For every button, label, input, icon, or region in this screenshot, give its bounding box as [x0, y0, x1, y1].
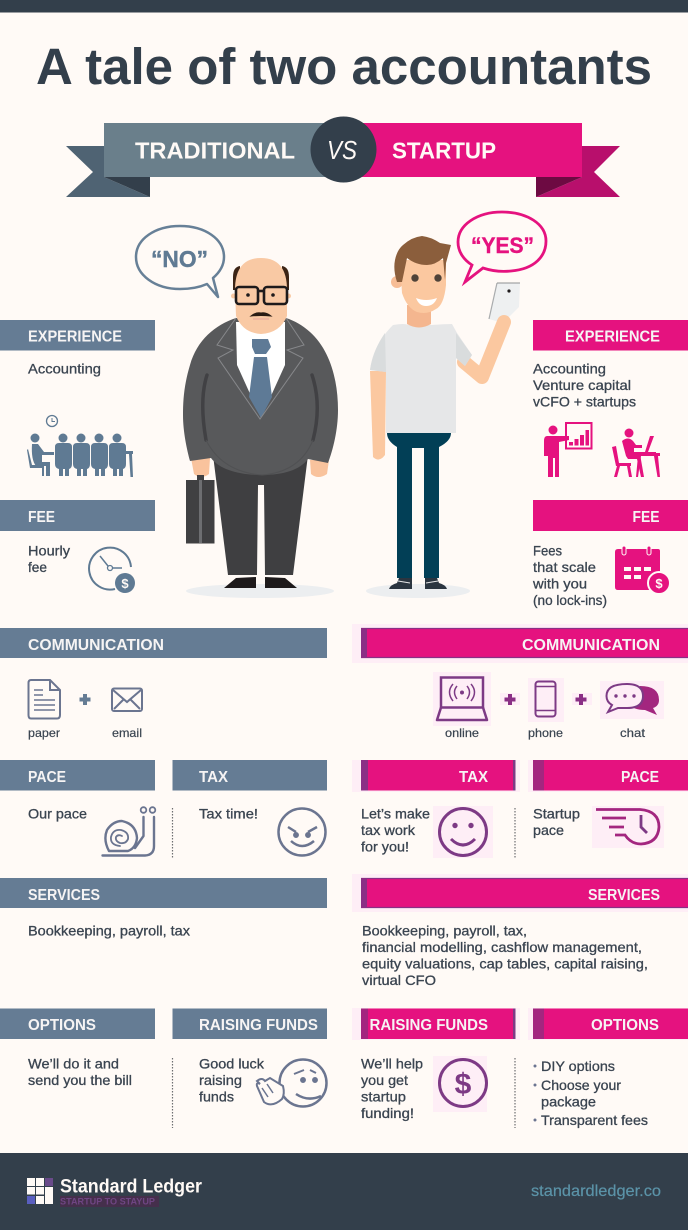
- panel: experience startup: EXPERIENCE: [565, 328, 660, 346]
- shirt: [236, 322, 285, 418]
- icon: angry face: [278, 808, 326, 856]
- text: tax time: Tax time!: [199, 806, 258, 822]
- text: options description: We’ll do it and: [28, 1056, 119, 1072]
- text: tax work: tax work: [361, 822, 416, 838]
- speech bubble: no: “NO”: [151, 246, 208, 272]
- speech bubble: no: [136, 226, 224, 297]
- right arm: [464, 322, 504, 377]
- panel: pace traditional: [0, 760, 155, 856]
- text: options description: send you the bill: [28, 1072, 132, 1088]
- icon: phone: [536, 682, 556, 716]
- panel: communication startup: COMMUNICATION: [522, 637, 660, 654]
- text: good luck: Good luck: [199, 1056, 265, 1072]
- text: startup pace: Startup: [533, 806, 580, 822]
- tagline: STARTUP TO STAYUP: [60, 1196, 155, 1206]
- panel: options startup: OPTIONS: [591, 1017, 659, 1034]
- lapels: [217, 318, 304, 419]
- head: [231, 258, 291, 334]
- character: traditional accountant: [183, 258, 338, 598]
- text: tax work: Let’s make: [361, 806, 430, 822]
- panel: tax traditional: [172, 760, 327, 856]
- text: our pace: Our pace: [28, 806, 87, 822]
- icon: plus: [80, 694, 90, 705]
- panel: communication traditional: [0, 628, 327, 740]
- character: startup accountant: [366, 236, 520, 598]
- panel: fee traditional: fee: [28, 559, 47, 575]
- icon: calendar with dollar: [615, 546, 670, 594]
- vs badge: [310, 116, 376, 182]
- footer: [0, 1153, 688, 1230]
- text: good luck: raising: [199, 1072, 242, 1088]
- panel: raising funds traditional: [172, 1008, 327, 1106]
- panel: services traditional: SERVICES: [28, 887, 100, 904]
- list: startup options: package: [541, 1094, 596, 1110]
- tie: [249, 339, 272, 418]
- panel: options traditional: OPTIONS: [28, 1017, 96, 1034]
- title: A tale of two accountants: [36, 38, 652, 95]
- panel: services startup: SERVICES: [588, 887, 660, 904]
- icon: waving face: [257, 1060, 326, 1106]
- divider: startup funds and options: [514, 1058, 516, 1128]
- list: startup options: Transparent fees: [541, 1112, 648, 1128]
- panel: options startup: [533, 1008, 688, 1128]
- panel: communication startup: [361, 628, 688, 740]
- text: we'll help: startup: [361, 1088, 406, 1104]
- text: fee description: (no lock-ins): [533, 592, 607, 608]
- top bar: [0, 0, 688, 12]
- text: we'll help: We’ll help: [361, 1056, 423, 1072]
- icon: plus: [504, 694, 516, 705]
- text: startup experience: vCFO + startups: [533, 394, 636, 410]
- suit jacket: [183, 318, 338, 475]
- text: fee description: that scale: [533, 559, 596, 575]
- trousers: [387, 433, 451, 578]
- panel: fee traditional: [0, 500, 155, 593]
- text: hourly fee: Hourly: [28, 542, 70, 558]
- text: we'll help: [361, 1056, 423, 1121]
- icon: paper: [28, 680, 60, 718]
- text: startup experience: Accounting: [533, 360, 606, 376]
- text: we'll help: you get: [361, 1072, 408, 1088]
- pale halos behind startup elements: [352, 624, 688, 1112]
- text: fee description: with you: [532, 576, 587, 592]
- ribbon label: traditional: TRADITIONAL: [135, 138, 295, 164]
- panel: fee startup: FEE: [632, 509, 660, 526]
- list: startup options: [534, 1058, 648, 1128]
- text: tax work: for you!: [361, 838, 409, 854]
- panel: tax startup: [361, 760, 516, 856]
- icon: clock with dollar: [89, 548, 135, 593]
- brand name: Standard Ledger: [60, 1176, 203, 1198]
- hands: [191, 458, 210, 477]
- panel: raising funds traditional: RAISING FUNDS: [199, 1017, 318, 1034]
- label: chat: chat: [620, 726, 646, 740]
- text: traditional services: Bookkeeping, payroll, tax: [28, 922, 190, 938]
- label: email: email: [112, 726, 142, 740]
- icon: person at laptop: [612, 428, 660, 477]
- text: good luck: funds: [199, 1088, 234, 1104]
- icon: chat bubbles: [606, 684, 659, 715]
- icon: laptop: [437, 678, 487, 720]
- t-shirt: [370, 324, 472, 433]
- panel: services startup: [361, 878, 688, 988]
- panel: tax startup: TAX: [459, 769, 488, 786]
- icon: dollar coin: $: [455, 1068, 472, 1101]
- text: startup services: virtual CFO: [362, 972, 436, 988]
- panel: experience traditional: [0, 320, 155, 477]
- text: options description: [28, 1056, 132, 1088]
- icon: email: [112, 688, 142, 711]
- website url: standardledger.co: [531, 1183, 661, 1200]
- list: startup options: Choose your: [541, 1077, 621, 1093]
- neck: [407, 305, 431, 328]
- text: we'll help: funding!: [361, 1105, 414, 1121]
- divider: traditional options and funds: [172, 1058, 174, 1128]
- panel: communication traditional: COMMUNICATION: [28, 637, 164, 654]
- panel: experience traditional: EXPERIENCE: [28, 328, 122, 346]
- text: startup pace: pace: [533, 822, 564, 838]
- panel: pace startup: PACE: [621, 769, 659, 786]
- speech bubble: yes: [458, 212, 546, 282]
- panel: options traditional: [0, 1008, 155, 1088]
- text: startup experience: [533, 360, 636, 410]
- text: startup pace: [533, 806, 580, 838]
- list: startup options: DIY options: [541, 1058, 615, 1074]
- icon: speeding clock: [596, 810, 659, 844]
- trousers: [213, 455, 308, 575]
- logo: standard ledger mark: [27, 1178, 53, 1204]
- head: [391, 236, 451, 313]
- speech bubble: yes: “YES”: [471, 233, 534, 258]
- text: startup services: Bookkeeping, payroll, tax,: [362, 922, 527, 938]
- text: startup services: equity valuations, cap tables, capital raising,: [362, 956, 648, 972]
- panel: pace startup: [533, 760, 688, 844]
- text: fee description: Fees: [533, 542, 562, 558]
- text: fee description: [532, 542, 607, 608]
- panel: services traditional: [0, 878, 327, 938]
- panel: tax traditional: TAX: [199, 769, 228, 786]
- text: startup services: financial modelling, cashflow management,: [362, 939, 642, 955]
- text: accounting: Accounting: [28, 360, 101, 376]
- icon: clock with dollar: $: [121, 576, 129, 591]
- icon: calendar with dollar: $: [655, 576, 663, 591]
- icon: dollar coin: [440, 1060, 486, 1106]
- text: tax work: [361, 806, 430, 854]
- phone: [489, 283, 520, 323]
- panel: pace traditional: PACE: [28, 769, 66, 786]
- panel: raising funds startup: RAISING FUNDS: [370, 1017, 488, 1034]
- left arm: [370, 371, 386, 460]
- icon: smiling face: [440, 808, 486, 856]
- icon: presenter with chart: [544, 423, 592, 477]
- label: paper: paper: [28, 726, 60, 740]
- panel: fee traditional: FEE: [28, 509, 55, 526]
- ribbon label: startup: STARTUP: [392, 138, 496, 164]
- text: startup experience: Venture capital: [533, 377, 631, 393]
- panel: experience startup: [533, 320, 688, 477]
- label: online: online: [445, 726, 479, 740]
- icon: snail: [102, 807, 155, 856]
- ribbon banner: traditional vs startup: [66, 116, 620, 197]
- divider: traditional pace and tax: [172, 808, 174, 858]
- briefcase: [186, 475, 214, 544]
- text: startup services: [362, 922, 648, 988]
- icon: plus: [576, 694, 586, 705]
- vs badge: VS: [327, 135, 358, 165]
- divider: startup tax and pace: [514, 808, 516, 858]
- panel: fee startup: [532, 500, 688, 608]
- text: good luck: [199, 1056, 265, 1104]
- icon: meeting with clock: [27, 416, 133, 477]
- panel: raising funds startup: [361, 1008, 516, 1121]
- label: phone: phone: [528, 726, 563, 740]
